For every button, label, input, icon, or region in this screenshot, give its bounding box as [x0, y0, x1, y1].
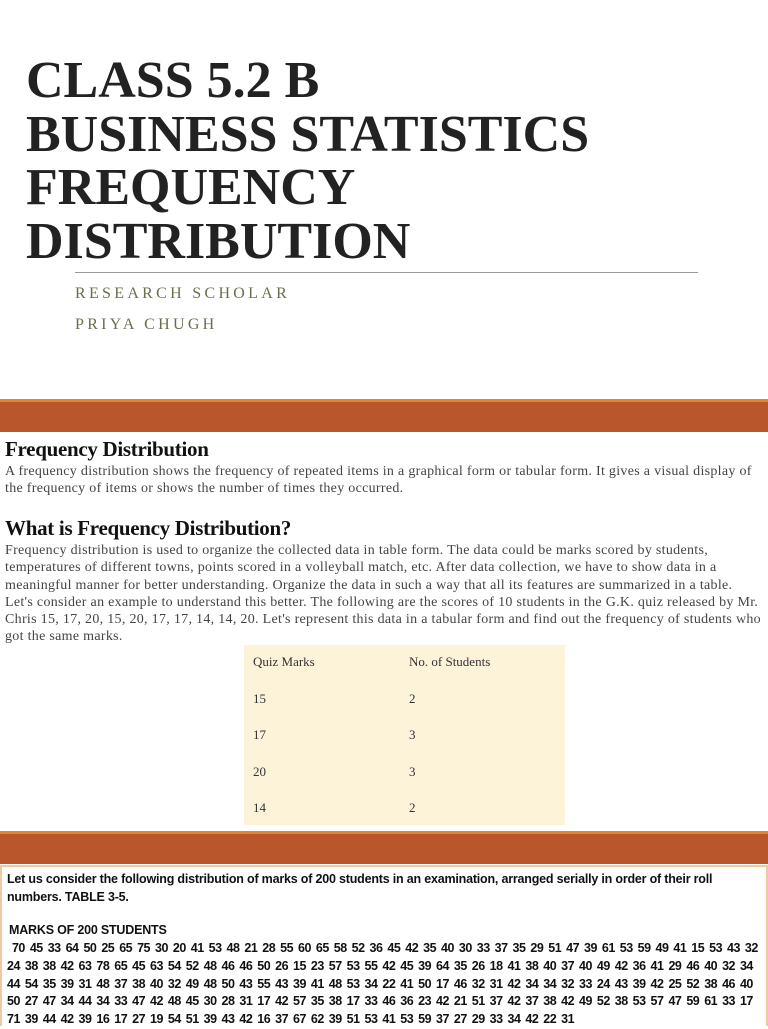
- table: quiz marks: 3: [409, 764, 416, 779]
- table: quiz marks: 3: [409, 727, 416, 742]
- bottom panel: marks of 200 students: MARKS OF 200 STUDENTS: [9, 923, 167, 937]
- paragraph 2: meaningful manner for better understanding. Organize the data in such a way that all its features are summarized in a table.: [5, 578, 732, 593]
- subtitle: research scholar: RESEARCH SCHOLAR: [75, 285, 290, 302]
- paragraph 1: [5, 464, 752, 496]
- heading: what is frequency distribution: What is Frequency Distribution?: [5, 516, 291, 540]
- table: quiz marks: Quiz Marks: [253, 654, 315, 669]
- table: quiz marks: 2: [409, 691, 416, 706]
- bottom panel: marks of 200 students: 44 54 35 39 31 48 37 38 40 32 49 48 50 43 55 43 39 41 48 53 34 22 41 50 17 46 32 31 42 34 34 32 33 24 43 39 42 25 52 38 46 40: [7, 977, 753, 991]
- paragraph 2: temperatures of different towns, points scored in a volleyball match, etc. After data collection, we have to show data in a: [5, 560, 717, 575]
- bottom panel: marks of 200 students: 50 27 47 34 44 34 33 47 42 48 45 30 28 31 17 42 57 35 38 17 33 46 36 23 42 21 51 37 42 37 38 42 49 52 38 53 57 47 59 61 33 17: [7, 994, 753, 1008]
- orange band 2: [0, 831, 768, 864]
- title: [26, 52, 589, 270]
- paragraph 2: Chris 15, 17, 20, 15, 20, 17, 17, 14, 14, 20. Let's represent this data in a tabular form and find out the frequency of students who: [5, 612, 761, 627]
- paragraph 2: Let's consider an example to understand this better. The following are the scores of 10 students in the G.K. quiz released by Mr.: [5, 595, 758, 610]
- bottom panel: marks of 200 students: 24 38 38 42 63 78 65 45 63 54 52 48 46 46 50 26 15 23 57 53 55 42 45 39 64 35 26 18 41 38 40 37 40 49 42 36 41 29 46 40 32 34: [7, 959, 753, 973]
- heading: frequency distribution: Frequency Distribution: [5, 437, 209, 461]
- orange band 1: [0, 399, 768, 432]
- paragraph 2: [5, 543, 761, 644]
- table: quiz marks: 15: [253, 691, 266, 706]
- table: quiz marks: No. of Students: [409, 654, 490, 669]
- table: quiz marks: 14: [253, 800, 266, 815]
- paragraph 1: A frequency distribution shows the frequency of repeated items in a graphical form or tabular form. It gives a visual display of: [5, 464, 752, 479]
- bottom panel: marks of 200 students: Let us consider the following distribution of marks of 200 students in an examination, arranged serially in order of their roll numbers. TABLE 3-5.: [7, 872, 712, 904]
- title: DISTRIBUTION: [26, 212, 410, 270]
- bottom panel: marks of 200 students: 71 39 44 42 39 16 17 27 19 54 51 39 43 42 16 37 67 62 39 51 53 41 53 59 37 27 29 33 34 42 22 31: [7, 1012, 574, 1026]
- paragraph 2: got the same marks.: [5, 629, 123, 644]
- title: BUSINESS STATISTICS: [26, 106, 589, 162]
- paragraph 1: the frequency of items or shows the number of times they occurred.: [5, 481, 403, 496]
- title: FREQUENCY: [26, 159, 355, 216]
- bottom panel: marks of 200 students: [0, 865, 768, 1026]
- paragraph 2: Frequency distribution is used to organize the collected data in table form. The data could be marks scored by students,: [5, 543, 708, 558]
- title: CLASS 5.2 B: [26, 52, 319, 109]
- subtitle: author: PRIYA CHUGH: [75, 316, 218, 333]
- bottom panel: marks of 200 students: 70 45 33 64 50 25 65 75 30 20 41 53 48 21 28 55 60 65 58 52 36 45 42 35 40 30 33 37 35 29 51 47 39 61 53 59 49 41 15 53 43 32: [12, 941, 758, 955]
- table: quiz marks: 2: [409, 800, 416, 815]
- table: quiz marks: [244, 645, 565, 825]
- table: quiz marks: 17: [253, 727, 266, 742]
- table: quiz marks: 20: [253, 764, 266, 779]
